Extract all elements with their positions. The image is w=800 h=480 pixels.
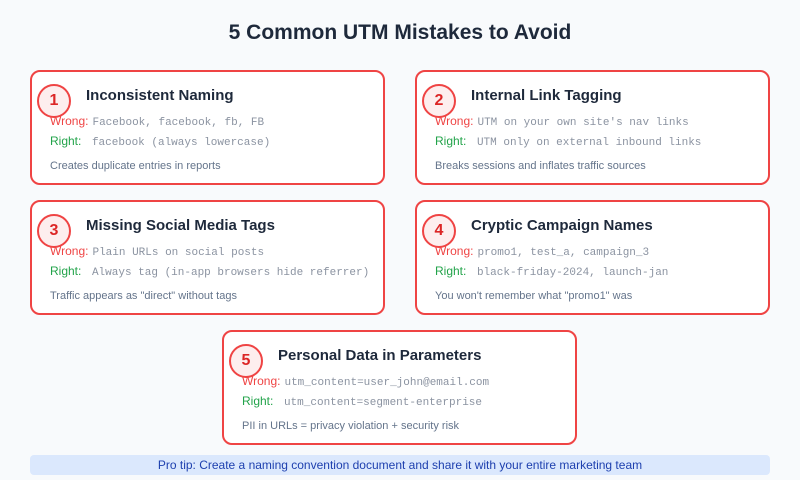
wrong: Wrong: Facebook, facebook, fb, FB (50, 114, 264, 129)
badge 4: 4 (435, 222, 443, 239)
pro tip banner: Pro tip: Create a naming convention document and share it with your entire marketing team (158, 458, 642, 472)
heading: Missing Social Media Tags (86, 217, 275, 234)
badge 5: 5 (242, 352, 250, 369)
note: Traffic appears as "direct" without tags (50, 290, 237, 302)
right: Right: UTM only on external inbound links (435, 134, 701, 149)
right: Right: facebook (always lowercase) (50, 134, 270, 149)
wrong: Wrong: promo1, test_a, campaign_3 (435, 244, 649, 259)
panel: missing social tags (30, 200, 385, 315)
heading: Inconsistent Naming (86, 87, 234, 104)
badge 3 (37, 214, 71, 248)
heading: Internal Link Tagging (471, 87, 622, 104)
note: Creates duplicate entries in reports (50, 160, 221, 172)
right: Right: black-friday-2024, launch-jan (435, 264, 668, 279)
panel: cryptic names (415, 200, 770, 315)
panel: internal link tagging (415, 70, 770, 185)
heading: Cryptic Campaign Names (471, 217, 653, 234)
badge 4 (422, 214, 456, 248)
badge 1: 1 (50, 92, 58, 109)
right: Right: Always tag (in-app browsers hide referrer) (50, 264, 369, 279)
badge 2 (422, 84, 456, 118)
note: Breaks sessions and inflates traffic sources (435, 160, 646, 172)
pro tip banner (30, 455, 770, 475)
wrong: Wrong: Plain URLs on social posts (50, 244, 264, 259)
note: PII in URLs = privacy violation + security risk (242, 420, 459, 432)
badge 3: 3 (50, 222, 58, 239)
badge 5 (229, 344, 263, 378)
title: 5 Common UTM Mistakes to Avoid (229, 21, 571, 44)
panel: personal data (222, 330, 577, 445)
note: You won't remember what "promo1" was (435, 290, 632, 302)
right: Right: utm_content=segment-enterprise (242, 394, 482, 409)
badge 2: 2 (435, 92, 443, 109)
wrong: Wrong: UTM on your own site's nav links (435, 114, 689, 129)
panel: inconsistent naming (30, 70, 385, 185)
wrong: Wrong: utm_content=user_john@email.com (242, 374, 489, 389)
badge 1 (37, 84, 71, 118)
heading: Personal Data in Parameters (278, 347, 481, 364)
